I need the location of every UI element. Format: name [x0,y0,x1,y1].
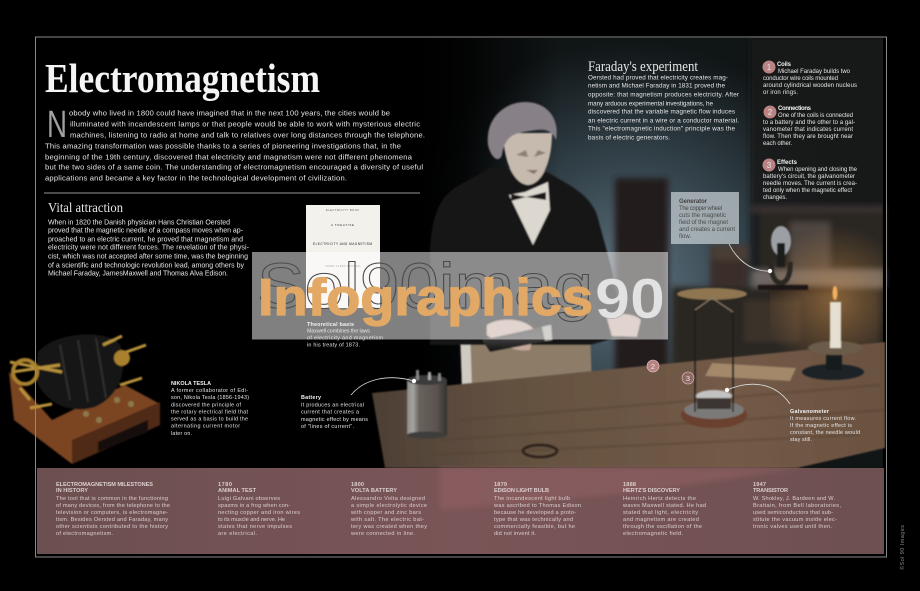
milestone 1888: stated that light, electricity [623,510,698,516]
section: Faraday's experiment: Oersted had proved that electricity creates mag- [588,74,728,82]
watermark [252,250,668,340]
illustration: battery [407,370,447,438]
drop cap: N [47,104,67,146]
milestone 1947: Brattain, from Bell laboratories, [753,503,841,509]
milestone 1780: to its muscle and nerve. He [218,517,285,523]
step 3: effects: battery's circuit, the galvanometer [763,174,855,180]
callout: generator: The copper wheel [679,206,722,212]
section: vital attraction: Michael Faraday, JamesMaxwell and Thomas Alva Edison. [48,270,228,278]
arrow: galvanometer leader line [725,384,790,404]
milestone 1888 [622,482,706,537]
illustration: galvanometer [677,288,747,428]
section: vital attraction: electricity were not different forces. The revelation of the physi- [48,244,250,252]
milestones intro: The tool that is common in the functioning [56,496,168,502]
watermark: Infographics [258,269,593,327]
section: vital attraction [48,201,250,278]
section: vital attraction: proached to an electric current, he proved that magnetism and [48,236,243,244]
milestone 1947: TRANSISTOR [753,488,788,494]
milestone 1888: electromagnetic field. [623,531,683,537]
callout: theoretical basis: of electricity and magnetism [307,336,384,342]
milestone 1780: are electrical. [218,531,257,537]
section: Faraday's experiment: discovered that the variable magnetic flow induces [588,108,735,116]
callout: battery: It produces an electrical [301,402,364,408]
illustration: treatise book: A TREATISE [331,223,354,227]
milestone 1879: EDISON LIGHT BULB [494,488,549,494]
milestone 1879 [493,482,581,537]
illustration: treatise book: ELECTRICITY AND MAGNETISM [313,242,372,246]
step 3: effects: Effects [777,160,798,166]
callout: Nikola Tesla [171,381,249,437]
step 1: coils [762,60,857,96]
title: Electromagnetism [45,55,320,101]
section: vital attraction: cist, which was not accepted after some time, was the beginning [48,254,248,260]
callout: galvanometer: It measures current flow. [790,416,856,422]
step 3: effects [762,158,858,201]
milestones intro [56,482,170,537]
milestone 1800: tery was created when they [351,524,427,530]
milestone 1879: 1879 [494,482,507,488]
callout: generator: and creates a current [679,227,735,233]
milestones intro: of electromagnetism. [56,531,113,537]
section: vital attraction: When in 1820 the Danish physician Hans Christian Oersted [48,220,230,226]
number badge: 1 [767,63,772,72]
intro paragraph: illuminated with incandescent lamps or that people would be able to work with mysterious electric [70,120,420,128]
milestone 1888: and magnetism are created [623,517,699,523]
callout: Nikola Tesla: the rotary electrical field that [171,410,248,416]
milestones intro: tism. Besides Oersted and Faraday, many [56,517,168,523]
callout: galvanometer: stay still. [790,437,812,443]
step 1: coils: around cylindrical wooden nucleus [763,83,857,89]
milestones intro: other scientists contributed to the history [56,524,168,530]
milestone 1947: stitute the vacuum inside elec- [753,517,837,523]
milestones intro: ELECTROMAGNETISM MILESTONES [56,482,153,488]
intro paragraph: but the two sides of a same coin. The understanding of electromagnetism encouraged a diversity of useful [45,162,423,172]
marker 3: 3 [686,374,690,383]
section: vital attraction: proved that the magnetic needle of a compass moves when ap- [48,228,244,234]
marker 2 [647,360,659,372]
step 2: connections: to a battery and the other to a gal- [763,120,855,126]
callout: galvanometer [790,409,860,443]
callout: galvanometer: constant, the needle would [790,430,860,436]
section: Faraday's experiment: This "electromagnetic induction" principle was the [588,126,735,132]
step 2: connections: vanometer that indicates current [763,127,853,133]
illustration: laboratory room background [420,38,886,468]
callout: Nikola Tesla: alternating current motor [171,424,240,430]
step 1: coils: Michael Faraday builds two [778,69,851,75]
intro paragraph: applications and became a key factor in the technological development of civilization. [45,174,347,182]
callout: theoretical basis: Theoretical basis [307,322,354,328]
milestone 1800: 1800 [351,482,364,488]
illustration: treatise book: ELECTRICITY BOOK [326,208,359,212]
hair [488,102,557,159]
callout: battery: current that creates a [301,410,359,416]
section: Faraday's experiment [588,59,739,142]
callout: galvanometer: Galvanometer [790,409,830,415]
milestone 1947: 1947 [753,482,766,488]
milestone 1800: with salt. The electric bat- [350,517,424,523]
heading: Faraday's experiment [588,59,698,75]
watermark: 90 [595,267,665,331]
callout: generator [671,192,739,244]
milestone 1879: The incandescent light bulb [494,496,570,502]
milestone 1780: ANIMAL TEST [218,488,257,494]
step 3: effects: needle moves. The current is crea- [763,181,857,187]
milestone 1780: states that nerve impulses [218,524,292,530]
callout: Nikola Tesla: served as a basis to build the [171,416,248,422]
number badge: 3 [767,161,772,170]
watermark: Sol90imag [257,250,593,322]
section: Faraday's experiment: netism and Michael Faraday in 1831 proved the [588,82,725,90]
milestone 1800: with copper and zinc bars [350,510,421,516]
section: Faraday's experiment: an electric current in a wire or a conductor material. [588,118,739,124]
step 3: effects: When opening and closing the [778,167,858,173]
milestone 1800: a simple electrolytic device [351,503,427,509]
step 3: effects: changes. [763,195,787,201]
coil [482,325,552,352]
hand right [607,314,641,337]
intro paragraph [45,104,425,182]
illustration: Tesla motor [9,335,160,464]
milestones intro: IN HISTORY [56,488,88,494]
hand left [487,320,534,350]
intro paragraph: This amazing transformation was possible thanks to a series of pioneering investigations that, in the [45,142,401,150]
milestone 1800: VOLTA BATTERY [351,488,397,494]
milestone 1947: tronic valves used until then. [753,524,832,530]
heading: Vital attraction [48,201,123,216]
coat [430,167,625,345]
milestone 1780: 1780 [218,482,232,488]
arrow: battery leader line [351,378,416,395]
milestone 1947: W. Shokley, J. Bardeen and W. [753,496,835,502]
callout: galvanometer: If the magnetic effect is [790,423,852,429]
milestone 1879: type that was technically and [494,517,573,523]
illustration: Michael Faraday [430,102,641,388]
callout: battery: magnetic effect by means [301,417,368,423]
step 1: coils: Coils [777,62,792,68]
milestones intro: television or computers, is electromagne- [56,510,168,516]
callout: Nikola Tesla: son, Nikola Tesla (1856-1943) [171,395,249,401]
callout: theoretical basis [307,322,384,348]
intro paragraph: obody who lived in 1800 could have imagined that in the next 100 years, the cities would be [69,108,390,118]
arrow: generator leader line [729,244,772,273]
callout: theoretical basis: Maxwell combines the laws [307,328,370,334]
milestone 1879: did not invent it. [494,531,536,537]
illustration: magneto generator [758,226,808,290]
milestone 1780: necting copper and iron wires [218,510,300,516]
step 3: effects: ted only when the magnetic effect [763,188,852,194]
marker 2: 2 [651,362,655,371]
milestones intro: of many devices, from the telephone to the [56,503,170,509]
milestone 1879: was ascribed to Thomas Edison [493,503,581,509]
milestone 1947: used semiconductors that sub- [753,510,833,516]
milestone 1888: waves Maxwell stated. He had [622,503,706,509]
milestone 1800: were connected in line. [350,531,415,537]
milestone 1800 [350,482,427,537]
apron [460,330,592,388]
callout: battery: Battery [301,395,321,401]
milestone 1888: 1888 [623,482,636,488]
illustration: candle [802,286,864,380]
section: Faraday's experiment: many arduous experimental investigations, he [588,100,713,108]
milestone 1780: Luigi Galvani observes [218,496,280,502]
section: Faraday's experiment: basis of electric generators. [588,134,670,142]
callout: generator: field of the magnet [679,220,728,226]
section: vital attraction: of a scientific and technologic revolution lead, among others by [48,262,244,270]
callout: Nikola Tesla: NIKOLA TESLA [171,381,211,387]
milestone 1780: spasms in a frog when con- [218,503,290,509]
milestone 1879: commercially feasible, but he [494,524,575,530]
marker 3 [682,372,694,384]
milestone 1888: Heinrich Hertz detects the [623,496,696,502]
milestone 1888: HERTZ'S DISCOVERY [623,488,680,494]
intro paragraph: beginning of the 19th century, discovered that electricity and magnetism were not different phenomena [45,152,413,162]
section: Faraday's experiment: opposite: that magnetism produces electricity. After [588,92,739,98]
callout: theoretical basis: in his treaty of 1873. [307,342,360,348]
intro paragraph: machines, listening to radio at home and talk to relatives over long distances through the telephone. [70,130,425,140]
callout: battery: of "lines of current". [301,424,354,430]
illustration: paper on table [705,363,796,381]
step 1: coils: conductor wire coils mounted [763,76,838,82]
callout: generator: Generator [679,199,708,205]
step 2: connections: Connections [778,106,812,112]
callout: Nikola Tesla: discovered the principle of [171,402,242,408]
callout: generator: cuts the magnetic [679,213,726,219]
illustration: treatise book [306,205,380,308]
step 2: connections: each other. [763,141,792,147]
step 2: connections: flow. Then they are brought near [763,134,853,140]
illustration: wooden table [372,342,885,468]
illustration: treatise book: JAMES CLERK MAXWELL [325,264,362,268]
credit: ©Sol 90 Images [899,525,906,570]
step 1: coils: or iron rings. [763,90,798,96]
milestone 1879: because he developed a proto- [494,510,576,516]
callout: Nikola Tesla: A former collaborator of Edi- [171,388,248,394]
callout: generator: flow. [679,234,691,240]
panel: milestones [37,468,884,554]
number badge: 2 [768,108,773,117]
neck and face [503,133,552,185]
callout: battery [301,395,368,430]
milestone 1947 [753,482,841,530]
step 2: connections [763,106,855,147]
milestone 1780 [218,482,300,537]
callout: Nikola Tesla: later on. [171,431,192,437]
step 2: connections: One of the coils is connected [778,113,853,119]
milestone 1888: through the oscillation of the [623,524,702,530]
shirt [509,182,550,245]
milestone 1800: Alessandro Volta designed [351,496,425,502]
